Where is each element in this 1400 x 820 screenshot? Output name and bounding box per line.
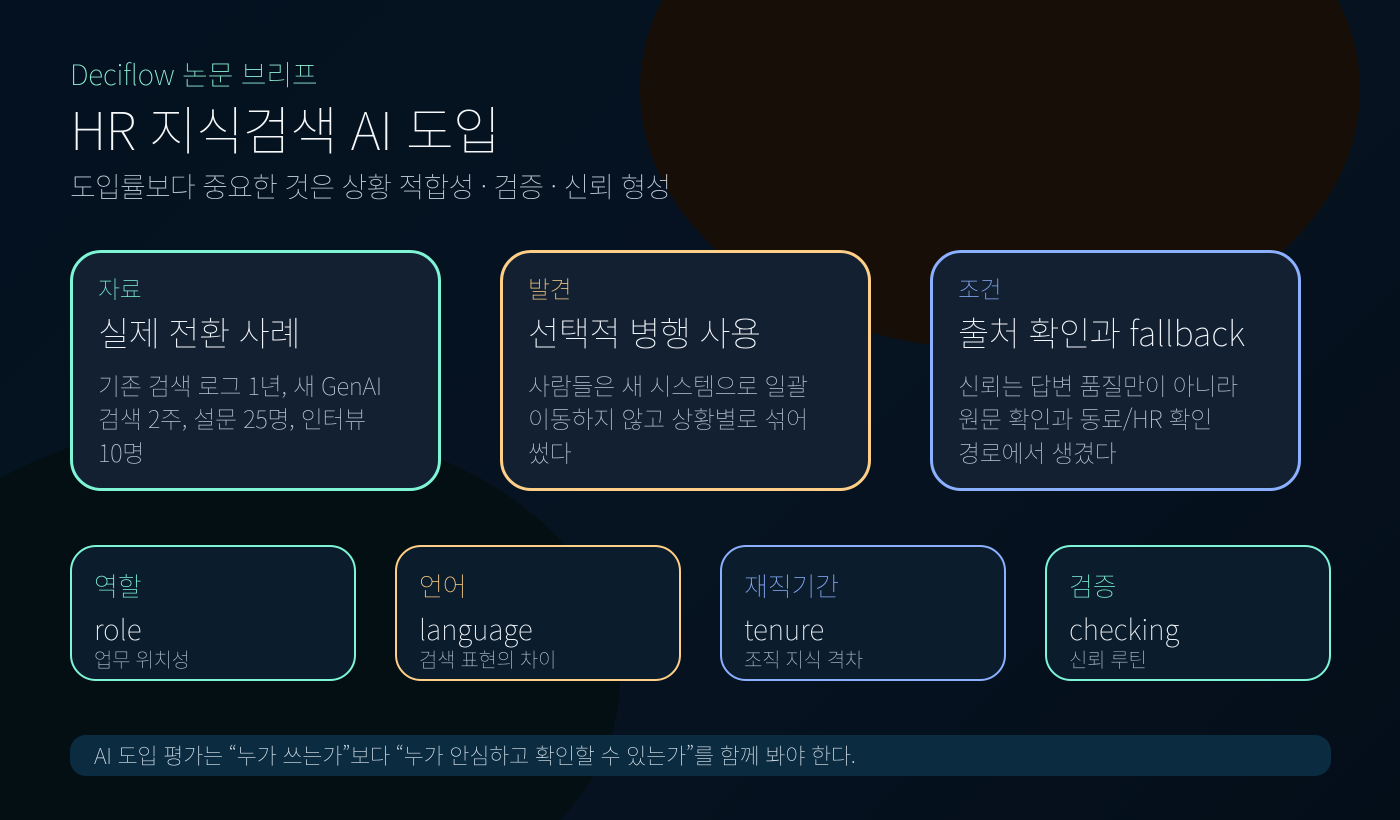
panel: 조건 <box>930 250 1301 491</box>
label: 발견 <box>528 270 571 305</box>
card: 재직기간 <box>720 545 1006 681</box>
body text: 10명 <box>98 434 144 469</box>
panel: 자료 <box>70 250 441 491</box>
term: tenure <box>744 609 824 649</box>
body text <box>98 367 382 469</box>
body text: 검색 2주, 설문 25명, 인터뷰 <box>98 400 366 435</box>
eyebrow: Deciflow 논문 브리프 <box>70 54 318 94</box>
description: 신뢰 루틴 <box>1069 644 1147 673</box>
label: 재직기간 <box>744 567 839 604</box>
body text: 원문 확인과 동료/HR 확인 <box>958 400 1212 435</box>
body text: 경로에서 생겼다 <box>958 434 1116 469</box>
heading: 실제 전환 사례 <box>98 307 300 356</box>
card: 언어 <box>395 545 681 681</box>
subtitle: 도입률보다 중요한 것은 상황 적합성 · 검증 · 신뢰 형성 <box>70 166 670 206</box>
term: checking <box>1069 609 1179 649</box>
description: 업무 위치성 <box>94 644 190 673</box>
panel: 발견 <box>500 250 871 491</box>
label: 검증 <box>1069 567 1116 604</box>
takeaway text: AI 도입 평가는 “누가 쓰는가”보다 “누가 안심하고 확인할 수 있는가”를 함께 봐야 한다. <box>94 739 856 771</box>
body text: 썼다 <box>528 434 571 469</box>
term: role <box>94 609 141 649</box>
card: 검증 <box>1045 545 1331 681</box>
body text: 이동하지 않고 상황별로 섞어 <box>528 400 808 435</box>
body text <box>528 367 808 469</box>
heading: 출처 확인과 fallback <box>958 307 1245 356</box>
label: 역할 <box>94 567 141 604</box>
body text <box>958 367 1238 469</box>
term: language <box>419 609 533 649</box>
body text: 기존 검색 로그 1년, 새 GenAI <box>98 367 382 402</box>
takeaway strip <box>70 735 1331 776</box>
description: 검색 표현의 차이 <box>419 644 556 673</box>
card: 역할 <box>70 545 356 681</box>
label: 조건 <box>958 270 1001 305</box>
label: 언어 <box>419 567 466 604</box>
heading: 선택적 병행 사용 <box>528 307 761 356</box>
body text: 사람들은 새 시스템으로 일괄 <box>528 367 808 402</box>
label: 자료 <box>98 270 141 305</box>
description: 조직 지식 격차 <box>744 644 863 673</box>
body text: 신뢰는 답변 품질만이 아니라 <box>958 367 1238 402</box>
title: HR 지식검색 AI 도입 <box>70 90 500 165</box>
